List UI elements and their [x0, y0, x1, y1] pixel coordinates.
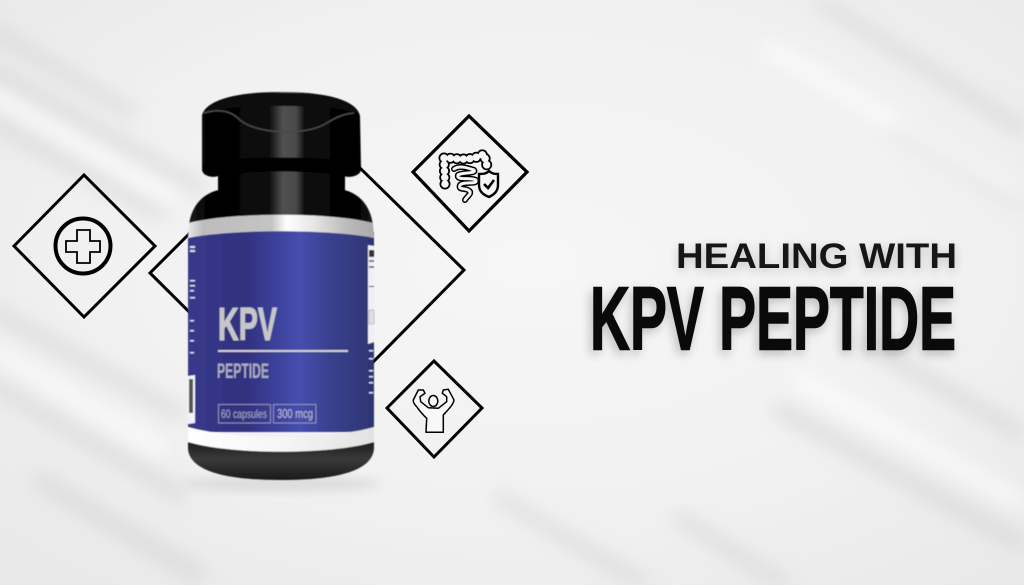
right side facts panel	[368, 245, 374, 344]
right side small print	[369, 350, 373, 394]
bottle shadow	[181, 476, 381, 492]
icon: muscular figure diamond	[387, 361, 482, 457]
dosage box	[274, 404, 316, 423]
cap flange	[202, 158, 361, 177]
icon: medical cross diamond	[14, 175, 155, 317]
dosage box: 300 mcg	[277, 406, 313, 421]
heading shadow: HEALING WITH	[676, 240, 957, 279]
blue label	[188, 228, 374, 432]
black base	[188, 442, 374, 480]
cap top rim	[203, 93, 359, 115]
icon: intestine with shield diamond	[413, 116, 527, 231]
capsule count box	[218, 404, 270, 423]
left side small print	[190, 246, 195, 354]
large background diamond outline	[150, 116, 464, 429]
label divider	[218, 350, 348, 352]
capsule count box: 60 capsules	[221, 407, 267, 421]
cap	[202, 92, 361, 177]
bottle neck	[218, 170, 345, 196]
label title KPV: KPV	[218, 298, 277, 350]
heading: healing with: HEALING WITH	[676, 237, 957, 276]
product bottle	[188, 92, 374, 480]
label subtitle PEPTIDE: PEPTIDE	[217, 360, 269, 383]
lower white band	[188, 427, 374, 454]
heading shadow	[587, 240, 957, 374]
bottle shoulder	[189, 190, 373, 226]
white upper band	[188, 215, 374, 238]
cap groove	[204, 111, 354, 132]
left side label strip	[188, 375, 195, 424]
